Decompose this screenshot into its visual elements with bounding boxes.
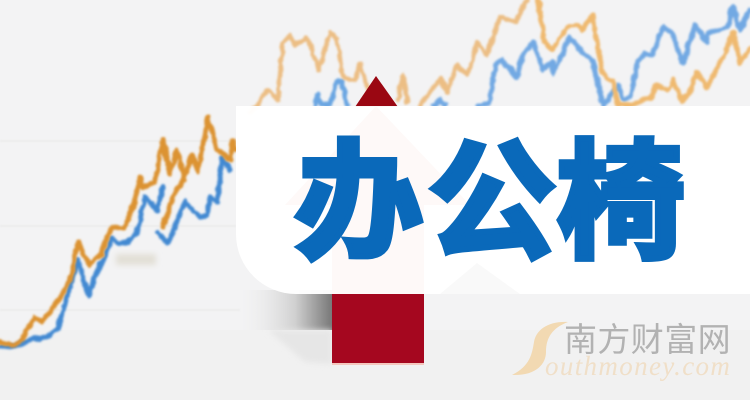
- watermark logo: 南方财富网 southmoney.com: [512, 321, 731, 381]
- watermark URL: outhmoney.com: [545, 351, 731, 381]
- title: 办公椅: 椅: [557, 132, 685, 275]
- watermark Chinese name: 南方财富网: [564, 321, 731, 358]
- title: 办公椅: 办: [295, 132, 423, 275]
- block shadow: [240, 290, 332, 364]
- title: 办公椅: [293, 132, 685, 275]
- red arrow: [332, 76, 424, 365]
- icon: S swoosh: [512, 322, 568, 375]
- faint arrow seen through the panel: [236, 106, 750, 294]
- white title panel: [236, 106, 750, 294]
- title: 办公椅: 公: [428, 132, 556, 275]
- smudge on the backdrop: [116, 254, 156, 265]
